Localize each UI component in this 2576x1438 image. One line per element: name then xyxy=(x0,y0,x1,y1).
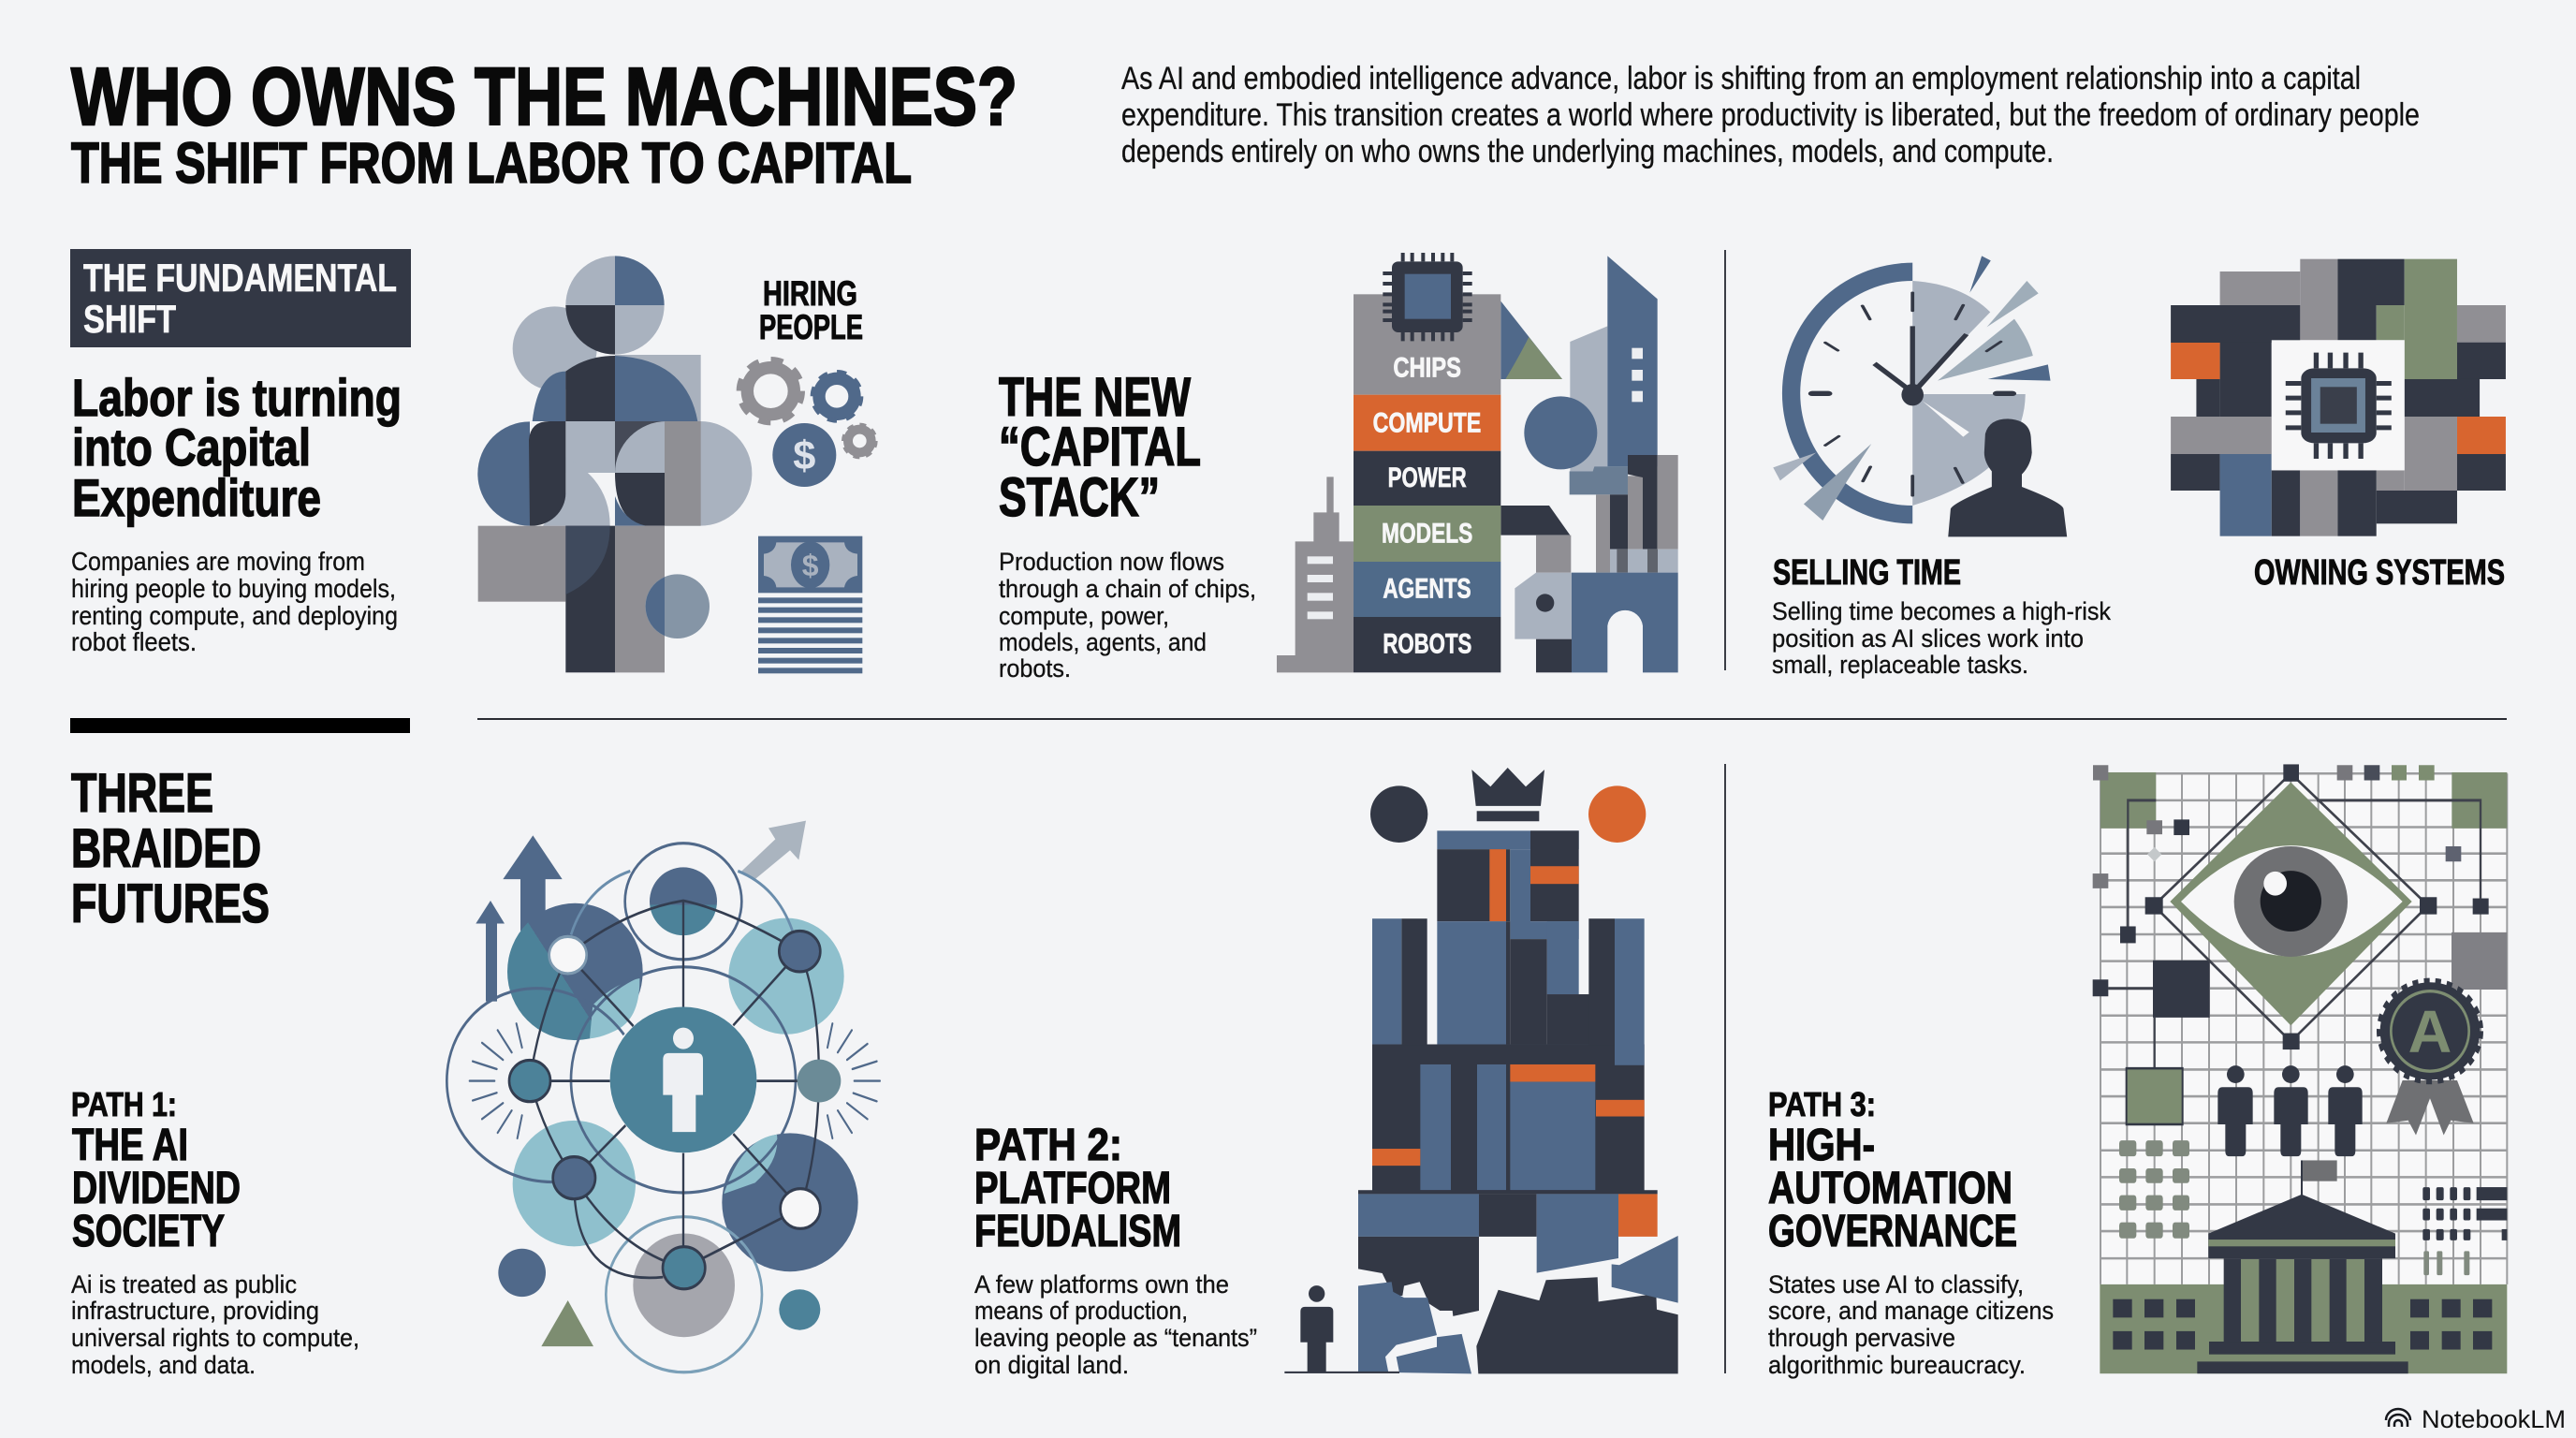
left building xyxy=(1277,477,1354,672)
illustration: platform feudalism tower xyxy=(1284,768,1678,1373)
heading: labor is turning into capex xyxy=(72,368,402,527)
arrows: growth xyxy=(476,821,806,1002)
layer: power xyxy=(1354,451,1500,506)
illustration: capital stack city xyxy=(1277,253,1678,672)
central person hub xyxy=(610,1006,756,1152)
heading: labor is turning into capex: Expenditure xyxy=(72,468,321,527)
wires and data nodes xyxy=(2093,765,2489,1124)
heading: GOVERNANCE xyxy=(1768,1207,2017,1256)
body text: Production now flows xyxy=(999,548,1224,576)
layer: models xyxy=(1354,506,1500,562)
radiating rays xyxy=(470,1023,880,1138)
connecting lines xyxy=(530,901,819,1278)
heading: three braided futures: THREE xyxy=(71,763,213,824)
illustration: owning systems chip block xyxy=(2171,259,2506,536)
section rule xyxy=(70,718,410,733)
panel: selling time text xyxy=(1772,553,2111,679)
heading: three braided futures: BRAIDED xyxy=(71,818,261,879)
label: owning systems: OWNING SYSTEMS xyxy=(2254,553,2505,593)
illustration: algorithmic governance xyxy=(2093,764,2507,1373)
layer: agents xyxy=(1354,562,1500,617)
body text: robots. xyxy=(999,654,1071,682)
section badge xyxy=(70,249,411,347)
person silhouette xyxy=(1948,418,2067,536)
crumbling rubble xyxy=(1358,1236,1678,1373)
icon: rating badge xyxy=(2380,982,2480,1136)
surveillance grid xyxy=(2100,772,2507,1284)
body text: A few platforms own the xyxy=(974,1270,1229,1299)
body text: algorithmic bureaucracy. xyxy=(1768,1351,2026,1379)
heading: THE AI xyxy=(72,1121,188,1170)
body text: through pervasive xyxy=(1768,1324,1955,1352)
layer: compute xyxy=(1354,395,1500,451)
clock slices xyxy=(1773,256,2051,521)
heading: FEUDALISM xyxy=(974,1207,1181,1256)
heading: PLATFORM xyxy=(974,1164,1171,1213)
main title: WHO OWNS THE MACHINES? xyxy=(71,51,1017,142)
panel: path 2 text xyxy=(974,1121,1257,1379)
body text: Companies are moving from xyxy=(71,547,365,576)
body text: universal rights to compute, xyxy=(71,1324,359,1352)
body text xyxy=(1768,1270,2054,1379)
heading: PATH 3: xyxy=(1768,1085,1876,1123)
illustration: ai dividend network xyxy=(446,821,880,1372)
body text: score, and manage citizens xyxy=(1768,1297,2054,1325)
label: hiring people: PEOPLE xyxy=(759,308,863,346)
body text: compute, power, xyxy=(999,602,1169,630)
body text: through a chain of chips, xyxy=(999,575,1256,603)
right machinery and tower xyxy=(1500,256,1678,672)
stack layers xyxy=(1354,294,1500,672)
body text xyxy=(71,547,398,656)
body text: renting compute, and deploying xyxy=(71,601,398,630)
panel: path 3 text xyxy=(1768,1085,2054,1379)
icon: citizens xyxy=(2217,1065,2363,1156)
layer: compute: COMPUTE xyxy=(1373,408,1481,439)
icon: central chip xyxy=(2286,353,2392,459)
heading: PATH 2: xyxy=(974,1121,1122,1170)
body text: models, agents, and xyxy=(999,628,1207,656)
clock hands xyxy=(1872,326,1969,405)
heading xyxy=(1768,1085,2017,1256)
body text: hiring people to buying models, xyxy=(71,574,396,603)
heading: PATH 1: xyxy=(71,1085,177,1123)
icon: banknote stack xyxy=(758,536,862,673)
brand: notebooklm: NotebookLM xyxy=(2422,1405,2566,1433)
layer: models: MODELS xyxy=(1382,518,1472,549)
heading: labor is turning into capex: into Capital xyxy=(72,418,311,477)
body text: Ai is treated as public xyxy=(71,1270,297,1299)
tower blocks xyxy=(1358,830,1658,1273)
panel: the fundamental shift xyxy=(70,249,411,656)
heading: HIGH- xyxy=(1768,1121,1875,1170)
body text xyxy=(999,548,1256,682)
icon: chip on top of stack xyxy=(1383,253,1472,341)
heading xyxy=(974,1121,1181,1256)
panel: selling time text: small, replaceable tasks. xyxy=(1772,651,2028,679)
heading: DIVIDEND xyxy=(72,1164,241,1213)
icon: gears and coin xyxy=(739,360,876,487)
panel: the new capital stack text xyxy=(999,367,1256,682)
clock rim xyxy=(1782,263,1912,523)
layer: power: POWER xyxy=(1388,462,1467,493)
background discs xyxy=(498,867,858,1346)
body text: robot fleets. xyxy=(71,627,197,656)
layer: agents: AGENTS xyxy=(1383,573,1471,604)
heading: THE NEW xyxy=(999,367,1191,428)
data cells xyxy=(2119,1140,2507,1275)
layer: chips: CHIPS xyxy=(1393,352,1461,383)
body text: States use AI to classify, xyxy=(1768,1270,2024,1299)
body text: means of production, xyxy=(974,1297,1188,1325)
section badge: THE FUNDAMENTAL xyxy=(83,256,397,300)
icon: all-seeing eye xyxy=(2145,764,2437,1049)
small person figure xyxy=(1284,1285,1399,1373)
network nodes xyxy=(509,931,841,1289)
label: hiring people: HIRING xyxy=(763,274,857,313)
panel: selling time text: SELLING TIME xyxy=(1773,553,1961,593)
rings xyxy=(446,844,796,1372)
heading: labor is turning into capex: Labor is turning xyxy=(72,368,402,427)
body text xyxy=(71,1270,359,1379)
icon: rating badge: A xyxy=(2408,999,2452,1066)
icon: gears and coin: $ xyxy=(793,434,815,479)
heading: AUTOMATION xyxy=(1768,1164,2012,1213)
body text: leaving people as “tenants” xyxy=(974,1324,1257,1352)
body text xyxy=(974,1270,1257,1379)
clock ticks xyxy=(1812,293,2012,495)
crown and orbs xyxy=(1370,768,1646,843)
layer: robots xyxy=(1354,617,1500,672)
heading: three braided futures: FUTURES xyxy=(71,873,270,934)
panel: path 1 text xyxy=(71,1085,359,1379)
intro paragraph xyxy=(1121,61,2420,169)
illustration: shattered clock with person xyxy=(1773,256,2067,536)
layer: robots: ROBOTS xyxy=(1383,628,1471,659)
body text: models, and data. xyxy=(71,1351,256,1379)
heading: “CAPITAL xyxy=(999,417,1201,477)
heading: SOCIETY xyxy=(72,1207,225,1256)
heading xyxy=(999,367,1201,528)
illustration: geometric worker xyxy=(477,256,752,672)
layer: chips xyxy=(1354,294,1500,395)
divider top xyxy=(1724,250,1726,670)
heading: three braided futures xyxy=(71,763,270,934)
panel: selling time text: position as AI slices work into xyxy=(1772,624,2084,653)
heading xyxy=(71,1085,241,1256)
label: hiring people xyxy=(759,274,863,346)
icon: banknote stack: $ xyxy=(802,549,819,582)
header title xyxy=(71,51,1017,195)
panel: selling time text: Selling time becomes a high-risk xyxy=(1772,597,2111,625)
intro paragraph: depends entirely on who owns the underlying machines, models, and compute. xyxy=(1121,134,2054,169)
heading: STACK” xyxy=(999,467,1160,528)
intro paragraph: As AI and embodied intelligence advance, labor is shifting from an employment relationship into a capital xyxy=(1121,61,2361,96)
government building xyxy=(2100,1160,2507,1373)
section badge: SHIFT xyxy=(83,297,176,341)
body text: infrastructure, providing xyxy=(71,1297,319,1325)
subtitle: THE SHIFT FROM LABOR TO CAPITAL xyxy=(71,131,912,195)
body text: on digital land. xyxy=(974,1351,1129,1379)
